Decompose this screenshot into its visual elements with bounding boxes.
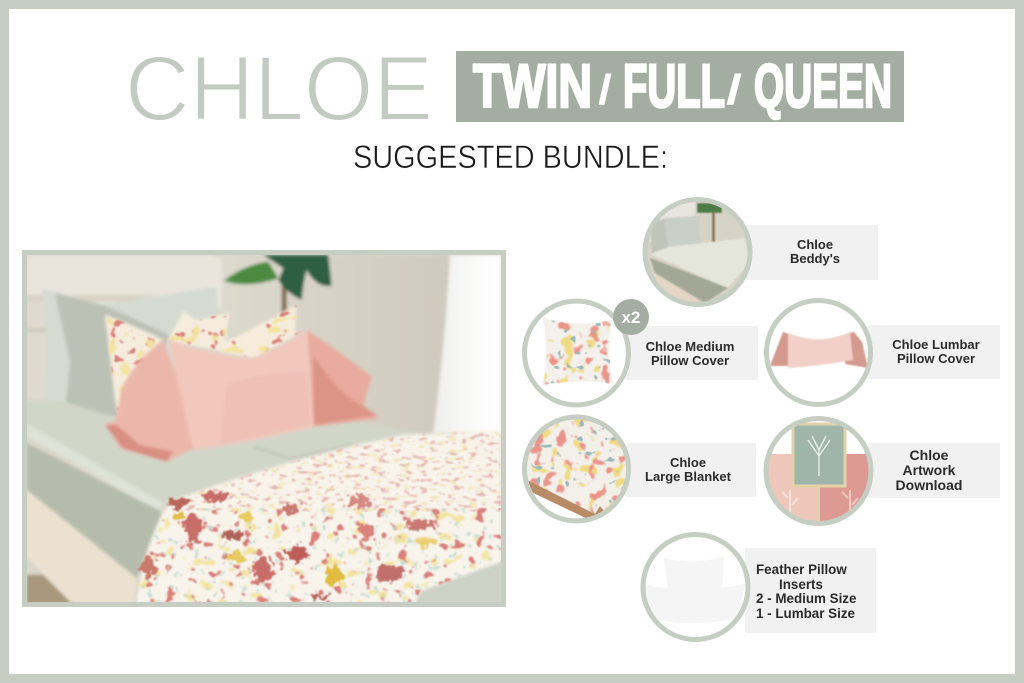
sage pillow — [55, 293, 170, 417]
circle photo — [648, 202, 748, 302]
circle photo — [527, 420, 626, 518]
label text: Pillow Cover — [651, 353, 729, 368]
headboard — [27, 255, 222, 308]
bundle item: Chloe Large Blanket — [520, 415, 756, 530]
label text: Feather Pillow — [756, 562, 847, 577]
circle ring — [524, 417, 628, 521]
circle ring — [766, 300, 870, 404]
circle photo — [543, 318, 613, 385]
lumbar pillow — [168, 329, 314, 450]
label text: Download — [896, 477, 962, 493]
label text: Pillow Cover — [897, 351, 975, 366]
size banner: / — [726, 66, 742, 113]
pillow print — [110, 319, 156, 411]
label panel — [868, 325, 1000, 379]
rug — [27, 575, 73, 605]
bed top — [30, 402, 402, 434]
badge x2: x2 — [622, 308, 640, 327]
blanket accent blotches — [142, 491, 436, 599]
bundle item: Chloe Lumbar Pillow Cover — [766, 300, 1000, 404]
badge x2 — [613, 299, 649, 335]
bundle item: Chloe Beddy's — [640, 195, 878, 310]
label panel — [625, 326, 758, 380]
ruffles — [105, 340, 193, 462]
label text: Beddy's — [790, 251, 840, 266]
curtain — [433, 255, 502, 433]
floral art stems — [808, 436, 830, 476]
label text: Chloe Medium — [646, 339, 734, 354]
bundle item: Chloe Artwork Download — [762, 418, 1000, 528]
bed side — [27, 443, 162, 578]
size banner: / — [598, 66, 612, 113]
size banner — [456, 51, 904, 122]
size banner: TWIN — [473, 52, 592, 120]
label text: Large Blanket — [645, 469, 732, 484]
circle ring — [524, 301, 628, 405]
size banner: QUEEN — [754, 52, 892, 120]
label text: Chloe — [797, 237, 833, 252]
blanket — [135, 430, 502, 607]
size banner: FULL — [623, 52, 725, 120]
label panel — [625, 443, 756, 497]
bundle item: Feather Pillow Inserts — [640, 532, 876, 644]
main bed photo — [24, 252, 504, 607]
label panel — [868, 443, 1000, 498]
circle ring — [643, 534, 748, 640]
label text: Inserts — [779, 577, 823, 592]
circle photo — [768, 422, 868, 521]
label text: Chloe — [910, 447, 949, 463]
title: Chloe: CHLOE — [125, 38, 433, 140]
label panel — [745, 548, 876, 633]
under sheet — [419, 564, 500, 602]
subtitle: SUGGESTED BUNDLE: — [353, 139, 668, 175]
wall — [220, 255, 453, 442]
label text: Chloe — [670, 455, 706, 470]
back pillow — [42, 287, 219, 405]
circle photo — [646, 556, 746, 623]
circle ring — [766, 418, 871, 524]
bed frame — [27, 490, 137, 605]
circle ring — [645, 200, 750, 304]
blanket print: far half — [163, 430, 502, 512]
circle photo — [770, 332, 868, 368]
label text: Artwork — [903, 462, 956, 478]
bundle item: Chloe Medium Pillow Cover — [524, 299, 758, 405]
plant — [282, 278, 287, 315]
label text: Chloe Lumbar — [892, 337, 980, 352]
blanket print: near half — [135, 508, 502, 607]
label panel — [745, 225, 878, 280]
label text: 1 - Lumbar Size — [756, 606, 855, 621]
label text: 2 - Medium Size — [756, 591, 856, 606]
floral pillows — [105, 315, 163, 422]
